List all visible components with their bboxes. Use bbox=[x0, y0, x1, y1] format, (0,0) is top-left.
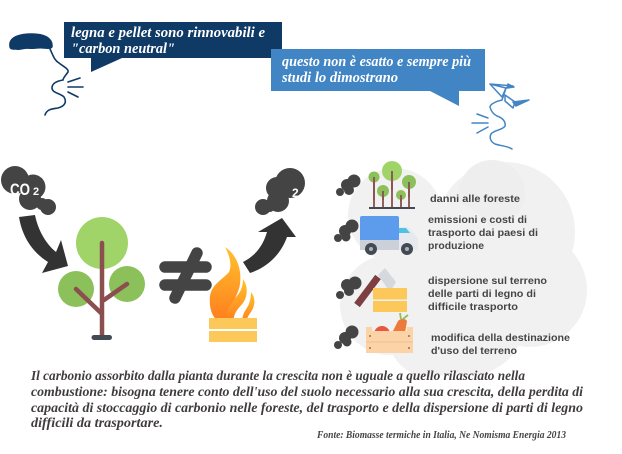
label: emissioni e costi bbox=[428, 214, 538, 252]
label: emissioni e costi: produzione bbox=[428, 240, 484, 252]
smoke icon 2 bbox=[334, 220, 358, 242]
icon: forest bbox=[368, 161, 416, 209]
body text: combustione: bisogna tenere conto dell'uso del suolo necessario alla sua crescita, della perdita di bbox=[31, 385, 583, 400]
icon: left face bbox=[10, 34, 83, 115]
icon: CO2 cloud: 2 bbox=[33, 186, 39, 198]
not equal sign bbox=[165, 253, 206, 298]
body text: capacità di stoccaggio di carbonio nelle foreste, del trasporto e della dispersione di parti di legno bbox=[31, 401, 583, 416]
label: dispersione: delle parti di legno di bbox=[428, 288, 536, 300]
label: emissioni e costi: trasporto dai paesi di bbox=[428, 227, 538, 239]
speech bubble: dark: "carbon neutral" bbox=[71, 41, 175, 57]
icon: CO2 released cloud bbox=[255, 168, 305, 215]
icon: tree bbox=[58, 217, 145, 340]
icon: flame and logs bbox=[209, 247, 257, 342]
body text bbox=[30, 369, 583, 431]
icon: axe and logs bbox=[357, 268, 407, 312]
label: modifica bbox=[431, 332, 570, 357]
smoke icon 3 bbox=[336, 276, 362, 299]
label: dispersione: difficile trasporto bbox=[428, 301, 518, 313]
smoke icon 4 bbox=[334, 326, 358, 349]
label: modifica: d'uso del terreno bbox=[431, 345, 517, 357]
background cloud bbox=[340, 160, 587, 377]
icon: crate with vegetables bbox=[366, 313, 413, 353]
smoke icon 1 bbox=[336, 174, 360, 196]
speech bubble: dark: legna e pellet sono rinnovabili e bbox=[71, 25, 266, 41]
arrow: out of fire bbox=[243, 218, 296, 273]
icon: CO2 cloud bbox=[1, 166, 56, 215]
speech bubble: blue bbox=[271, 49, 485, 106]
source: Fonte: Biomasse termiche in Italia, Ne Nomisma Energia 2013 bbox=[316, 430, 566, 441]
label: modifica: modifica della destinazione bbox=[431, 332, 570, 344]
icon: right face bbox=[472, 84, 529, 149]
speech bubble: dark bbox=[64, 22, 282, 72]
label: emissioni e costi: emissioni e costi di bbox=[428, 214, 527, 226]
speech bubble: blue: studi lo dimostrano bbox=[281, 70, 398, 86]
body text: difficili da trasportare. bbox=[31, 416, 163, 431]
label: dispersione: dispersione sul terreno bbox=[428, 275, 547, 287]
icon: truck bbox=[360, 216, 418, 255]
icon: CO2 cloud: CO bbox=[10, 180, 30, 199]
icon: CO2 released cloud: 2 bbox=[292, 186, 299, 200]
speech bubble: blue: questo non è esatto e sempre più bbox=[282, 54, 471, 70]
label: danni alle foreste: danni alle foreste bbox=[430, 193, 520, 205]
body text: Il carbonio assorbito dalla pianta durante la crescita non è uguale a quello rilasciato nella bbox=[30, 369, 525, 384]
label: dispersione bbox=[428, 275, 547, 313]
arrow: into tree bbox=[19, 215, 68, 273]
